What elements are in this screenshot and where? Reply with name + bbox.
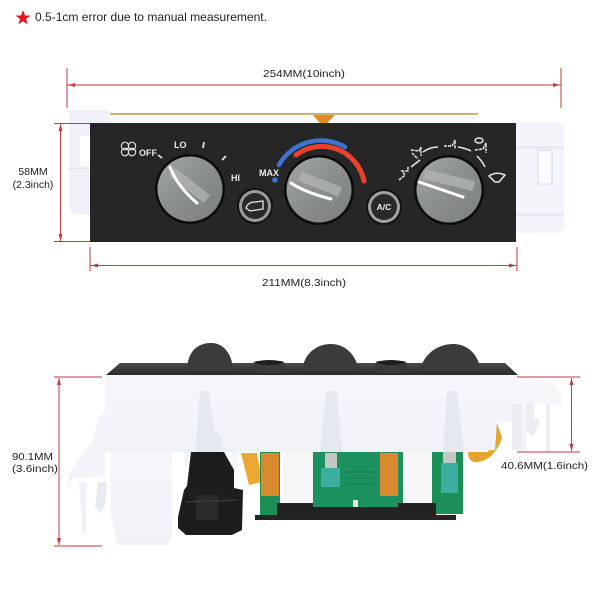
orange slider switches: [261, 453, 398, 496]
icon: red star: [16, 10, 30, 24]
width label: 254MM(10inch): [263, 68, 345, 80]
dimension: 40.6MM: [501, 377, 588, 472]
top-down view: assembly side: [67, 343, 563, 545]
top view: control panel front: [68, 110, 564, 242]
white housing body: [105, 375, 563, 452]
left white mounting tab: [68, 110, 111, 214]
dimension: height 58MM: [13, 124, 90, 242]
MAX label: MAX: [259, 168, 279, 178]
green circuit board: [260, 452, 463, 515]
knob: center: [302, 344, 358, 371]
button post: right: [375, 360, 407, 373]
black base strip: [255, 503, 456, 520]
black plug connector: [178, 452, 243, 535]
temperature arc: red: [296, 146, 364, 181]
amber slider left stray: [241, 453, 262, 485]
right white mounting tab: [516, 122, 564, 233]
right clip ribs: [512, 403, 550, 453]
height label: 58MM: [18, 166, 48, 178]
note text: 0.5-1cm error due to manual measurement.: [35, 10, 267, 24]
LO label: LO: [174, 140, 186, 150]
faceplate label: 211MM(8.3inch): [262, 277, 346, 289]
depth label: 90.1MM: [12, 451, 53, 463]
A/C button: A/C: [377, 202, 391, 212]
temperature knob: [284, 155, 354, 225]
left clip: [67, 412, 105, 488]
dimension: height 58MM: (2.3inch): [13, 179, 53, 191]
HI label: HI: [231, 173, 240, 183]
amber strip along the top edge: [110, 113, 478, 123]
knob: right: [420, 344, 480, 371]
white posts: [184, 452, 432, 502]
black top surface: [106, 363, 518, 375]
A/C button: [366, 189, 402, 225]
ribbon cable: [468, 420, 502, 462]
fan speed ticks: [158, 142, 226, 160]
dimension: depth 90.1MM: (3.6inch): [12, 463, 58, 475]
temperature arc: blue: [279, 140, 345, 165]
teal potentiometers: [321, 463, 458, 493]
fan knob: [155, 154, 225, 224]
button post: left: [253, 360, 285, 373]
icon: fan: [121, 142, 136, 156]
lower connector housing: [110, 452, 172, 545]
40.6MM label: 40.6MM(1.6inch): [501, 460, 588, 472]
dimension: faceplate width 211MM: [90, 247, 517, 289]
blue dot: [272, 177, 278, 183]
black faceplate: [90, 123, 516, 242]
OFF label: OFF: [139, 148, 157, 158]
dimension: depth 90.1MM: [12, 377, 102, 546]
knob: left: [187, 343, 233, 371]
fan speed labels: [121, 140, 279, 183]
recirculation button: [237, 188, 273, 224]
note: measurement error: [16, 10, 267, 24]
mode knob: [414, 155, 484, 225]
housing notches: [195, 391, 464, 452]
dimension: overall width 254MM: [67, 68, 561, 108]
mode selector icons and arc: [399, 138, 505, 182]
